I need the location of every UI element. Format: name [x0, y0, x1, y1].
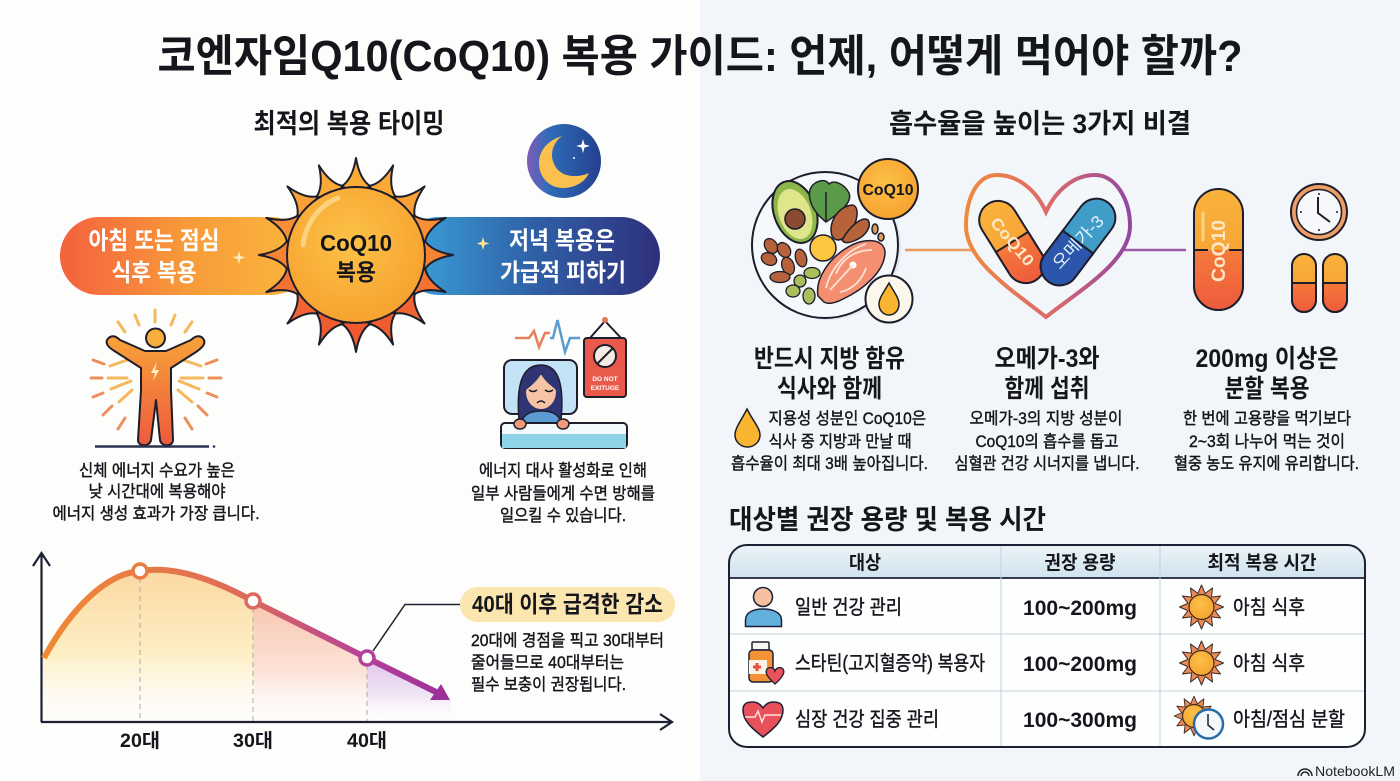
- chart: CoQ10 decline with age: 40대: [347, 730, 387, 752]
- row 2: statin users: 아침 식후: [1233, 652, 1305, 675]
- icon: clock: [1291, 184, 1347, 240]
- heading: dosage table: 대상별 권장 용량 및 복용 시간: [729, 505, 1046, 535]
- pecan: [831, 205, 884, 243]
- callout: sharp decline after 40s: 필수 보충이 권장됩니다.: [471, 675, 626, 694]
- row 2: statin users: 100~200mg: [1023, 653, 1137, 676]
- row 3: heart health: [743, 696, 1345, 738]
- background: left panel: [0, 0, 700, 781]
- leaf: [809, 181, 850, 222]
- icon: CoQ10 badge: [858, 159, 918, 219]
- pill: morning or lunch: 아침 또는 점심: [88, 227, 220, 255]
- icon: sun: [1180, 585, 1224, 629]
- watermark: NotebookLM: NotebookLM: [1315, 763, 1395, 779]
- connector lines: [905, 249, 1186, 251]
- icon: CoQ10 capsule tilted: [972, 194, 1052, 290]
- icon: large CoQ10 capsule: CoQ10: [1209, 220, 1230, 282]
- icon: CoQ10 capsule tilted: CoQ10: [986, 215, 1037, 270]
- title: 코엔자임Q10(CoQ10) 복용 가이드: 언제, 어떻게 먹어야 할까?: [158, 32, 1242, 81]
- icon: sun and clock: [1174, 696, 1223, 738]
- column 3 heading: [1196, 345, 1338, 403]
- column 2 heading: 오메가-3와: [994, 345, 1100, 373]
- olives: [786, 268, 820, 304]
- column 2 heading: [994, 345, 1100, 403]
- arrowhead: [430, 684, 450, 700]
- icon: small split capsules: [1292, 254, 1347, 312]
- row 2: statin users: [749, 641, 1305, 685]
- column 2 body: CoQ10의 흡수를 돕고: [976, 432, 1118, 451]
- column 3 body: 2~3회 나누어 먹는 것이: [1189, 432, 1345, 451]
- row 1: general health: 아침 식후: [1233, 596, 1305, 619]
- callout: sharp decline after 40s: 20대에 경점을 픽고 30대부터: [471, 631, 664, 650]
- almonds: [759, 236, 809, 282]
- chart: CoQ10 decline with age: 20대: [120, 730, 160, 752]
- text: sleep disruption: 에너지 대사 활성화로 인해: [479, 461, 647, 480]
- pill: avoid evening: [400, 217, 660, 295]
- column 2 body: [954, 409, 1140, 473]
- pill: avoid evening: 저녁 복용은: [509, 227, 615, 255]
- text: daytime dosing: 낮 시간대에 복용해야: [88, 482, 226, 501]
- avocado: [764, 175, 826, 249]
- column 3 heading: 200mg 이상은: [1196, 345, 1338, 373]
- icon: sleeping person with sign: [501, 317, 627, 448]
- chart: CoQ10 decline with age: [33, 553, 672, 752]
- icon: CoQ10 badge: CoQ10: [862, 182, 914, 199]
- column 2 body: 오메가-3의 지방 성분이: [970, 409, 1122, 428]
- icon: sleeping person with sign: DO NOT: [592, 376, 618, 383]
- column 1 body: [731, 409, 928, 473]
- text: daytime dosing: [52, 461, 260, 523]
- column 3 heading: 분할 복용: [1224, 375, 1310, 403]
- column 1 body: 식사 중 지방과 만날 때: [768, 432, 912, 451]
- sun with CoQ10: [259, 158, 453, 352]
- row 3: heart health: 100~300mg: [1023, 709, 1137, 732]
- icon: oil drop badge: [866, 276, 912, 322]
- column 1 heading: [754, 345, 905, 403]
- chart: CoQ10 decline with age: 30대: [233, 730, 273, 752]
- icon: moon: [527, 124, 601, 198]
- heading: optimal timing: 최적의 복용 타이밍: [254, 109, 444, 139]
- heading: 3 absorption secrets: 흡수율을 높이는 3가지 비결: [889, 109, 1191, 139]
- table: dosage by group: [729, 545, 1365, 747]
- row 1: general health: 일반 건강 관리: [795, 596, 902, 619]
- column 1 body: 지용성 성분인 CoQ10은: [768, 409, 926, 428]
- column 2 body: 심혈관 건강 시너지를 냅니다.: [954, 454, 1140, 473]
- table header: 권장 용량: [1044, 552, 1116, 574]
- chart area fill: [43, 570, 451, 722]
- icon: oil drop inline: [735, 409, 760, 447]
- column 1 body: 흡수율이 최대 3배 높아집니다.: [731, 454, 928, 473]
- table header: 대상: [849, 552, 881, 574]
- text: daytime dosing: 신체 에너지 수요가 높은: [79, 461, 235, 480]
- row 3: heart health: 아침/점심 분할: [1233, 708, 1345, 731]
- text: sleep disruption: 일부 사람들에게 수면 방해를: [471, 484, 655, 503]
- sun with CoQ10: CoQ10: [320, 230, 392, 256]
- pill: avoid evening: 가급적 피하기: [500, 259, 626, 287]
- text: sleep disruption: [471, 461, 655, 525]
- icon: sleeping person with sign: EXITUGE: [591, 385, 620, 392]
- icon: omega-3 capsule tilted: 오메가-3: [1049, 212, 1108, 273]
- column 3 body: 한 번에 고용량을 먹기보다: [1183, 409, 1351, 428]
- callout: sharp decline after 40s: [373, 587, 675, 694]
- column 1 heading: 반드시 지방 함유: [754, 345, 905, 373]
- icon: food plate: [752, 172, 901, 320]
- row 1: general health: 100~200mg: [1023, 597, 1137, 620]
- salmon: [818, 241, 885, 303]
- icon: heart with pulse: [743, 702, 783, 737]
- table header: [849, 552, 1316, 574]
- icon: large CoQ10 capsule: [1194, 189, 1243, 310]
- background: right panel: [700, 0, 1400, 781]
- icon: medicine bottle with heart: [749, 642, 784, 684]
- column 3 body: 혈중 농도 유지에 유리합니다.: [1174, 454, 1359, 473]
- icon: sun: [1180, 641, 1224, 685]
- column 1 heading: 식사와 함께: [777, 375, 882, 403]
- pill: morning or lunch: [60, 217, 310, 295]
- text: sleep disruption: 일으킬 수 있습니다.: [500, 506, 626, 525]
- row 3: heart health: 심장 건강 집중 관리: [795, 708, 939, 731]
- icon: heart outline: [966, 175, 1130, 317]
- yolk: [810, 235, 836, 261]
- row 2: statin users: 스타틴(고지혈증약) 복용자: [795, 652, 985, 675]
- callout: sharp decline after 40s: 40대 이후 급격한 감소: [472, 591, 663, 617]
- text: daytime dosing: 에너지 생성 효과가 가장 큽니다.: [52, 504, 260, 523]
- pill: morning or lunch: 식후 복용: [112, 259, 196, 287]
- table header: 최적 복용 시간: [1208, 552, 1316, 574]
- column 2 heading: 함께 섭취: [1004, 375, 1090, 403]
- column 3 body: [1174, 409, 1359, 473]
- row 1: general health: [746, 585, 1305, 629]
- icon: omega-3 capsule tilted: [1033, 191, 1123, 293]
- icon: person: [746, 588, 782, 626]
- sun with CoQ10: 복용: [336, 259, 376, 285]
- icon: energetic person: [91, 310, 221, 448]
- callout: sharp decline after 40s: 줄어들므로 40대부터는: [471, 653, 624, 672]
- chart axes: [33, 553, 672, 730]
- curve: [44, 570, 436, 692]
